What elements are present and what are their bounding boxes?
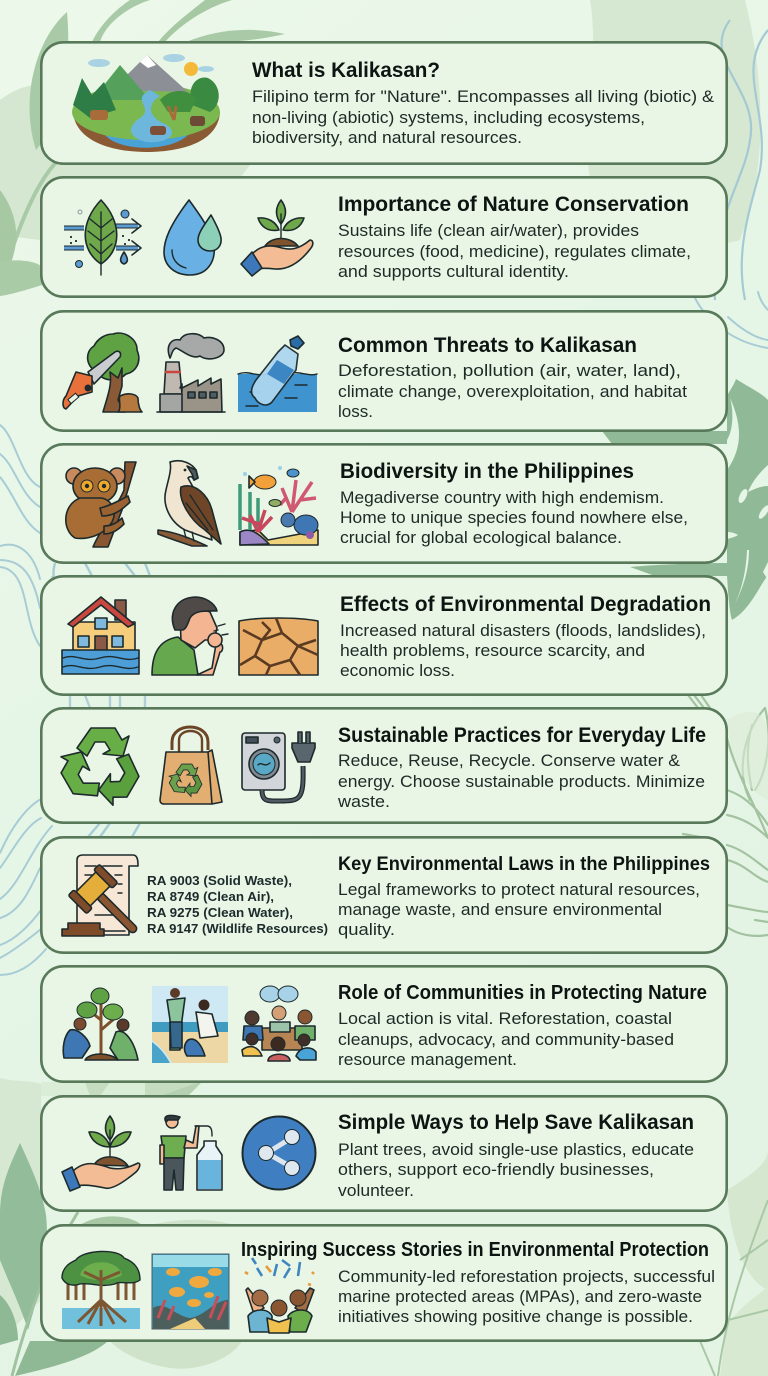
body text: manage waste, and ensure environmental [338,900,662,919]
body text: and supports cultural identity. [338,262,569,281]
icon: beach cleanup [152,986,228,1063]
icon: reusable bag [160,727,222,804]
law list: RA 9275 (Clean Water), [147,905,293,920]
icon: man refilling bottle [160,1115,222,1190]
heading: Importance of Nature Conservation [338,193,689,216]
heading: Simple Ways to Help Save Kalikasan [338,1111,694,1134]
body text: health problems, resource scarcity, and [340,641,645,660]
body text [340,488,688,547]
heading: Sustainable Practices for Everyday Life [338,724,706,747]
body text: Legal frameworks to protect natural resources, [338,880,700,899]
icon: washing machine and plug [242,732,315,801]
panel: importance [41,177,727,297]
icon: tarsier [66,462,136,547]
heading: Biodiversity in the Philippines [340,460,634,483]
body text: crucial for global ecological balance. [340,528,622,547]
icon: tree planting [63,988,138,1060]
icon: recycle symbol [54,728,146,809]
heading: Effects of Environmental Degradation [340,593,711,616]
icon: coral reef [240,466,318,545]
body text: Home to unique species found nowhere else, [340,508,688,527]
panel: simple ways [41,1096,727,1211]
icon: hand with seedling [62,1116,140,1191]
icon: water drop [164,200,221,275]
body text [340,621,706,680]
law list: RA 9147 (Wildlife Resources) [147,921,328,936]
body text: Megadiverse country with high endemism. [340,488,664,507]
heading: Role of Communities in Protecting Nature [338,982,707,1004]
panel: what is Kalikasan [41,42,727,164]
body text [338,1009,674,1069]
body text: Plant trees, avoid single-use plastics, educate [338,1140,694,1159]
body text: Reduce, Reuse, Recycle. Conserve water & [338,751,681,770]
body text: waste. [337,792,390,811]
law list: RA 8749 (Clean Air), [147,889,274,904]
body text: Deforestation, pollution (air, water, land), [338,361,681,380]
body text: marine protected areas (MPAs), and zero-waste [338,1287,702,1306]
icon: mangrove [62,1251,140,1329]
body text [337,751,705,811]
body text: Local action is vital. Reforestation, coastal [338,1009,672,1028]
icon: plastic bottle in water [238,336,317,412]
icon: factory [157,334,225,412]
icon: gavel and scroll [62,855,151,947]
body text: energy. Choose sustainable products. Minimize [338,772,705,791]
body text: others, support eco-friendly businesses, [338,1160,654,1179]
heading: Key Environmental Laws in the Philippines [338,853,710,875]
body text [338,221,691,281]
icon: share symbol [242,1116,316,1190]
body text [338,1267,715,1326]
panel: success stories [41,1225,727,1341]
heading: Inspiring Success Stories in Environmental Protection [241,1239,709,1261]
body text: non-living (abiotic) systems, including ecosystems, [252,108,645,127]
body text: Sustains life (clean air/water), provides [338,221,639,240]
icon: community meeting [242,986,316,1061]
body text: Increased natural disasters (floods, landslides), [340,621,706,640]
body text [252,87,715,147]
body text: loss. [338,402,373,421]
body text [338,880,700,939]
icon: coughing man [152,597,228,675]
icon: island ecosystem [72,54,220,152]
body text: resource management. [338,1050,517,1069]
body text [338,361,687,421]
icon: Philippine eagle [158,461,221,546]
body text: economic loss. [340,661,455,680]
body text: Filipino term for "Nature". Encompasses all living (biotic) & [252,87,715,106]
body text: initiatives showing positive change is possible. [338,1307,693,1326]
icon: hand with sprout [241,200,313,276]
icon: chainsaw and tree [63,333,142,412]
heading: What is Kalikasan? [252,59,440,82]
panel: communities [41,966,727,1082]
panel: environmental laws [41,837,727,953]
body text: climate change, overexploitation, and habitat [338,382,687,401]
icon: cracked earth [239,618,318,675]
panel: threats [41,311,727,431]
law list [147,873,328,936]
icon: celebrating people [245,1258,314,1333]
body text [338,1140,694,1200]
panel: biodiversity [41,444,727,563]
body text: quality. [338,920,395,939]
body text: biodiversity, and natural resources. [252,128,522,147]
body text: cleanups, advocacy, and community-based [338,1030,674,1049]
panel: sustainable practices [41,708,727,823]
law list: RA 9003 (Solid Waste), [147,873,292,888]
icon: leaf with air [64,200,141,275]
panel: effects [41,576,727,695]
body text: resources (food, medicine), regulates climate, [338,242,691,261]
icon: marine protected area [152,1254,229,1329]
icon: flooded house [62,597,139,674]
body text: Community-led reforestation projects, successful [338,1267,715,1286]
body text: volunteer. [338,1181,414,1200]
heading: Common Threats to Kalikasan [338,334,637,357]
